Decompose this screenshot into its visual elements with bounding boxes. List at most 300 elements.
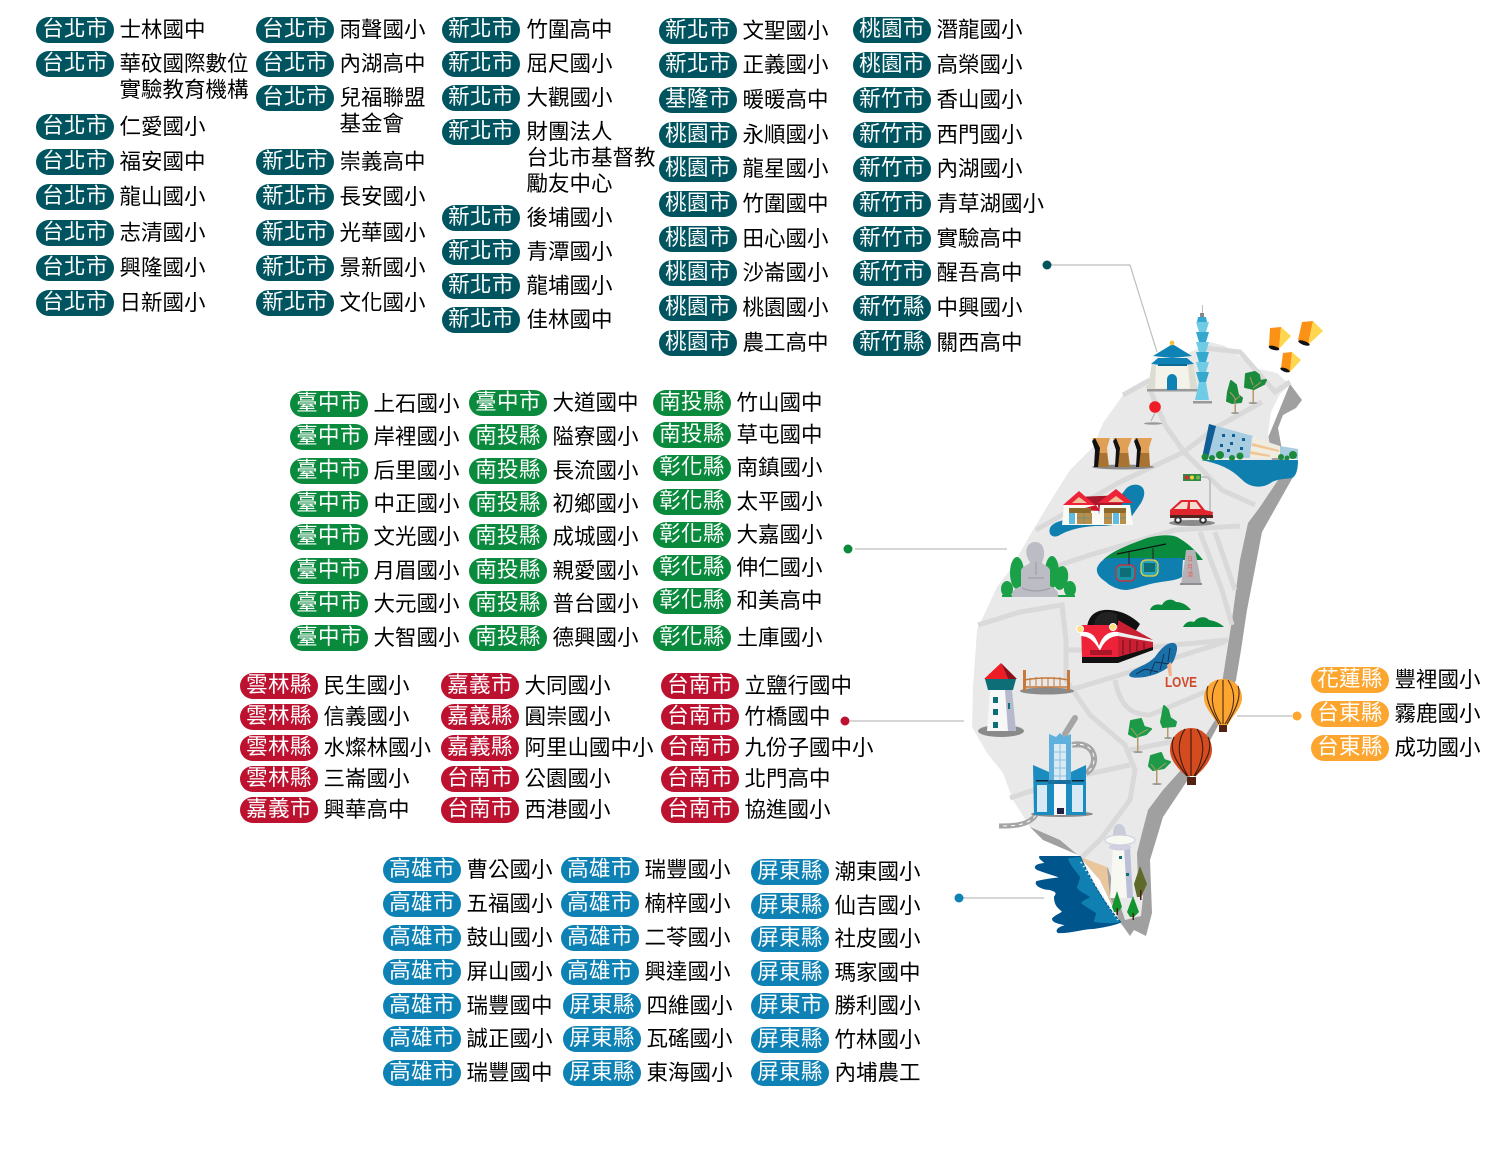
school: 台南市 九份子國中小: 台南市 <box>667 735 733 759</box>
school: 基隆市 暖暖高中: 暖暖高中 <box>742 88 829 112</box>
school: 彰化縣 大嘉國小 <box>653 522 853 548</box>
school: 新北市 光華國小: 新北市 <box>262 220 328 244</box>
icon: Sun Moon Lake with gondola: 潭 <box>1187 571 1193 579</box>
school: 台南市 九份子國中小: 九份子國中小 <box>744 736 874 760</box>
school: 桃園市 永順國小: 桃園市 <box>665 122 731 146</box>
school: 臺中市 大元國小: 大元國小 <box>374 592 460 616</box>
school: 台北市 內湖高中: 台北市 <box>262 51 328 75</box>
school: 臺中市 大智國小 <box>290 625 490 651</box>
school: 新北市 文聖國小 <box>659 18 829 44</box>
school: 新北市 正義國小: 正義國小 <box>742 53 829 77</box>
school: 台北市 華砇國際數位實驗教育機構: 華砇國際數位 <box>120 52 249 76</box>
school: 桃園市 高榮國小: 高榮國小 <box>936 53 1023 77</box>
school: 南投縣 普台國小: 南投縣 <box>475 591 541 615</box>
school: 新竹市 西門國小: 新竹市 <box>859 122 925 146</box>
school: 臺中市 大道國中 <box>469 390 669 416</box>
icon: map pin <box>1144 401 1162 425</box>
school: 新北市 後埔國小: 後埔國小 <box>526 206 613 230</box>
school: 屏東縣 四維國小 <box>563 993 763 1019</box>
school: 南投縣 初鄉國小 <box>469 491 669 517</box>
school: 屏東縣 瓦磘國小 <box>563 1026 763 1052</box>
school: 台北市 日新國小: 台北市 <box>42 290 108 314</box>
school: 嘉義縣 圓崇國小: 嘉義縣 <box>447 704 513 728</box>
school: 台北市 志清國小: 志清國小 <box>120 221 206 245</box>
school: 彰化縣 南鎮國小: 彰化縣 <box>659 455 725 479</box>
school: 台南市 西港國小 <box>441 797 641 823</box>
school: 臺中市 文光國小 <box>290 524 490 550</box>
icon: Alishan train <box>1076 610 1153 663</box>
school: 新北市 竹圍高中: 新北市 <box>448 17 514 41</box>
school: 南投縣 初鄉國小: 初鄉國小 <box>552 492 639 516</box>
school: 新北市 龍埔國小: 龍埔國小 <box>526 274 613 298</box>
connector lines <box>850 265 1292 898</box>
school: 高雄市 鼓山國小: 鼓山國小 <box>466 926 553 950</box>
icon: red car <box>1169 500 1215 526</box>
school: 台北市 龍山國小: 台北市 <box>42 184 108 208</box>
school: 嘉義市 大同國小 <box>441 673 641 699</box>
school: 臺中市 大元國小: 臺中市 <box>296 591 362 615</box>
school: 台南市 九份子國中小 <box>661 735 861 761</box>
school: 新北市 崇義高中: 新北市 <box>262 149 328 173</box>
school: 桃園市 農工高中: 農工高中 <box>742 331 829 355</box>
school: 南投縣 初鄉國小: 南投縣 <box>475 491 541 515</box>
school: 新北市 財團法人台北市基督教勵友中心: 財團法人 <box>526 120 613 144</box>
school: 台南市 公園國小: 台南市 <box>447 766 513 790</box>
school: 新北市 屈尺國小 <box>442 51 613 77</box>
school: 高雄市 二苓國小: 二苓國小 <box>644 926 731 950</box>
school: 臺中市 月眉國小 <box>290 558 490 584</box>
school: 新北市 文化國小 <box>256 290 426 316</box>
school: 新北市 正義國小 <box>659 52 829 78</box>
school: 嘉義市 大同國小: 大同國小 <box>524 674 611 698</box>
school: 屏東縣 潮東國小: 潮東國小 <box>834 860 921 884</box>
school: 台南市 竹橋國中: 台南市 <box>667 704 733 728</box>
school: 台北市 仁愛國小: 台北市 <box>42 114 108 138</box>
school: 台南市 北門高中: 北門高中 <box>744 767 831 791</box>
school: 嘉義縣 阿里山國中小: 阿里山國中小 <box>524 736 654 760</box>
school: 台北市 士林國中: 台北市 <box>42 17 108 41</box>
school: 新北市 屈尺國小: 屈尺國小 <box>526 52 613 76</box>
school: 桃園市 龍星國小 <box>659 156 829 182</box>
school: 彰化縣 土庫國小: 土庫國小 <box>736 626 823 650</box>
school: 基隆市 暖暖高中 <box>659 87 829 113</box>
school: 高雄市 誠正國小: 高雄市 <box>389 1026 455 1050</box>
school: 新竹市 西門國小 <box>853 122 1023 148</box>
school: 台北市 興隆國小: 興隆國小 <box>120 256 206 280</box>
school: 新竹市 醒吾高中: 醒吾高中 <box>936 261 1023 285</box>
school: 屏東縣 社皮國小: 社皮國小 <box>834 927 921 951</box>
school: 台北市 日新國小 <box>36 290 206 316</box>
school: 屏東市 勝利國小 <box>751 993 951 1019</box>
school: 高雄市 瑞豐國小: 瑞豐國小 <box>644 858 731 882</box>
school: 桃園市 桃園國小: 桃園市 <box>665 295 731 319</box>
school: 南投縣 隘寮國小: 隘寮國小 <box>552 425 639 449</box>
school: 彰化縣 南鎮國小 <box>653 455 853 481</box>
school: 屏東縣 四維國小: 屏東縣 <box>569 993 635 1017</box>
school: 新竹市 實驗高中: 實驗高中 <box>936 227 1023 251</box>
school: 新北市 崇義高中 <box>256 149 426 175</box>
school: 桃園市 田心國小 <box>659 226 829 252</box>
school: 新北市 財團法人台北市基督教勵友中心 <box>442 119 656 196</box>
school: 南投縣 普台國小 <box>469 591 669 617</box>
school: 臺中市 后里國小: 臺中市 <box>296 458 362 482</box>
school: 雲林縣 信義國小: 雲林縣 <box>246 704 312 728</box>
roads <box>978 348 1290 857</box>
school: 台南市 北門高中 <box>661 766 861 792</box>
school: 新竹市 香山國小: 香山國小 <box>936 88 1023 112</box>
school: 台南市 西港國小: 台南市 <box>447 797 513 821</box>
school: 南投縣 長流國小: 南投縣 <box>475 458 541 482</box>
school: 屏東縣 東海國小 <box>563 1060 763 1086</box>
list: northern schools: 實驗教育機構 <box>120 78 249 102</box>
icon: central trees <box>1129 706 1176 785</box>
school: 南投縣 德興國小: 德興國小 <box>552 626 639 650</box>
school: 台南市 北門高中: 台南市 <box>667 766 733 790</box>
school: 臺中市 月眉國小: 臺中市 <box>296 558 362 582</box>
school: 台北市 興隆國小 <box>36 255 206 281</box>
school: 新竹縣 中興國小: 中興國小 <box>936 296 1023 320</box>
school: 屏東縣 潮東國小: 屏東縣 <box>757 859 823 883</box>
school: 高雄市 屏山國小: 高雄市 <box>389 959 455 983</box>
school: 彰化縣 土庫國小: 彰化縣 <box>659 625 725 649</box>
school: 屏東縣 竹林國小: 竹林國小 <box>834 1028 921 1052</box>
school: 高雄市 瑞豐國中 second: 瑞豐國中 <box>466 1061 553 1085</box>
school: 桃園市 農工高中: 桃園市 <box>665 330 731 354</box>
school: 新北市 文聖國小: 文聖國小 <box>742 19 829 43</box>
school: 新竹市 醒吾高中: 新竹市 <box>859 260 925 284</box>
school: 屏東縣 瑪家國中 <box>751 960 951 986</box>
school: 新北市 青潭國小 <box>442 239 613 265</box>
school: 桃園市 永順國小 <box>659 122 829 148</box>
school: 臺中市 大元國小 <box>290 591 490 617</box>
school: 高雄市 二苓國小 <box>561 925 761 951</box>
school: 台南市 公園國小: 公園國小 <box>524 767 611 791</box>
school: 南投縣 隘寮國小 <box>469 424 669 450</box>
school: 台北市 龍山國小: 龍山國小 <box>120 185 206 209</box>
school: 雲林縣 信義國小 <box>240 704 440 730</box>
school: 新北市 竹圍高中: 竹圍高中 <box>526 18 613 42</box>
school: 桃園市 桃園國小 <box>659 295 829 321</box>
school: 雲林縣 民生國小: 雲林縣 <box>246 673 312 697</box>
school: 彰化縣 和美高中: 和美高中 <box>736 589 823 613</box>
school: 台北市 華砇國際數位實驗教育機構 <box>36 51 249 102</box>
island shadow coast <box>1030 384 1302 936</box>
school: 新北市 青潭國小: 青潭國小 <box>526 240 613 264</box>
icon: northern trees <box>1227 372 1266 414</box>
school: 屏東市 勝利國小: 勝利國小 <box>834 994 921 1018</box>
school: 高雄市 五福國小 <box>383 891 583 917</box>
school: 台南市 竹橋國中 <box>661 704 861 730</box>
school: 南投縣 德興國小: 南投縣 <box>475 625 541 649</box>
school: 新竹市 內湖國小: 新竹市 <box>859 156 925 180</box>
school: 新北市 後埔國小 <box>442 205 613 231</box>
school: 新北市 佳林國中: 新北市 <box>448 307 514 331</box>
school: 高雄市 興達國小 <box>561 959 761 985</box>
school: 新北市 長安國小: 長安國小 <box>340 185 426 209</box>
school: 台北市 興隆國小: 台北市 <box>42 255 108 279</box>
school: 屏東縣 瑪家國中: 屏東縣 <box>757 960 823 984</box>
icon: north coast building and lake <box>1201 424 1298 487</box>
school: 桃園市 田心國小: 桃園市 <box>665 226 731 250</box>
icon: Sun Moon Lake with gondola: 日 <box>1187 556 1193 563</box>
school: 新北市 景新國小: 景新國小 <box>340 256 426 280</box>
school: 雲林縣 信義國小: 信義國小 <box>324 705 410 729</box>
school: 新北市 大觀國小: 大觀國小 <box>526 86 613 110</box>
school: 屏東縣 東海國小: 東海國小 <box>646 1061 733 1085</box>
school: 台北市 雨聲國小: 台北市 <box>262 17 328 41</box>
school: 桃園市 龍星國小: 龍星國小 <box>742 157 829 181</box>
school: 桃園市 高榮國小: 桃園市 <box>859 52 925 76</box>
school: 屏東縣 竹林國小 <box>751 1027 951 1053</box>
school: 嘉義市 興華高中 <box>240 797 440 823</box>
school: 台東縣 成功國小: 成功國小 <box>1394 736 1481 760</box>
school: 南投縣 長流國小: 長流國小 <box>552 459 639 483</box>
school: 高雄市 五福國小: 五福國小 <box>466 892 553 916</box>
school: 高雄市 曹公國小: 曹公國小 <box>466 858 553 882</box>
school: 嘉義市 興華高中: 嘉義市 <box>246 797 312 821</box>
school: 臺中市 后里國小 <box>290 458 490 484</box>
school: 雲林縣 三崙國小: 三崙國小 <box>324 767 410 791</box>
school: 高雄市 瑞豐國中: 瑞豐國中 <box>466 994 553 1018</box>
school: 台南市 協進國小 <box>661 797 861 823</box>
icon: high-heel shoe and LOVE: LOVE <box>1165 674 1197 691</box>
icon: red hot-air balloon <box>1170 728 1212 785</box>
school: 南投縣 竹山國中: 南投縣 <box>659 390 725 414</box>
school: 南投縣 長流國小 <box>469 458 669 484</box>
school: 臺中市 大道國中: 臺中市 <box>475 390 541 414</box>
school: 台東縣 霧鹿國小: 台東縣 <box>1317 701 1383 725</box>
school: 新北市 長安國小: 新北市 <box>262 184 328 208</box>
school: 彰化縣 伸仁國小: 伸仁國小 <box>736 556 823 580</box>
school: 桃園市 竹圍國中: 桃園市 <box>665 191 731 215</box>
school: 彰化縣 太平國小 <box>653 489 853 515</box>
school: 新北市 景新國小: 新北市 <box>262 255 328 279</box>
school: 台北市 雨聲國小 <box>256 17 426 43</box>
school: 彰化縣 大嘉國小: 大嘉國小 <box>736 523 823 547</box>
school: 屏東市 勝利國小: 屏東市 <box>757 993 823 1017</box>
school: 屏東縣 仙吉國小: 屏東縣 <box>757 893 823 917</box>
school: 屏東縣 竹林國小: 屏東縣 <box>757 1027 823 1051</box>
school: 桃園市 永順國小: 永順國小 <box>742 123 829 147</box>
icon: lake and red-roof houses <box>1049 485 1144 537</box>
school: 南投縣 成城國小 <box>469 524 669 550</box>
school: 臺中市 岸裡國小: 岸裡國小 <box>374 425 460 449</box>
school: 新北市 後埔國小: 新北市 <box>448 205 514 229</box>
school: 南投縣 普台國小: 普台國小 <box>552 592 639 616</box>
school: 南投縣 草屯國中: 南投縣 <box>659 422 725 446</box>
school: 新北市 正義國小: 新北市 <box>665 52 731 76</box>
school: 新北市 崇義高中: 崇義高中 <box>340 150 426 174</box>
school: 桃園市 潛龍國小: 桃園市 <box>859 17 925 41</box>
school: 台北市 華砇國際數位實驗教育機構: 台北市 <box>42 51 108 75</box>
school: 高雄市 瑞豐國中: 高雄市 <box>389 993 455 1017</box>
school: 屏東縣 社皮國小: 屏東縣 <box>757 926 823 950</box>
school: 高雄市 鼓山國小 <box>383 925 583 951</box>
school: 雲林縣 三崙國小: 雲林縣 <box>246 766 312 790</box>
school: 屏東縣 瓦磘國小: 瓦磘國小 <box>646 1027 733 1051</box>
school: 臺中市 后里國小: 后里國小 <box>374 459 460 483</box>
school: 臺中市 上石國小 <box>290 391 490 417</box>
school: 新北市 景新國小 <box>256 255 426 281</box>
icon: Sun Moon Lake with gondola: 月 <box>1187 564 1193 571</box>
school: 台南市 公園國小 <box>441 766 641 792</box>
school: 台北市 志清國小 <box>36 220 206 246</box>
icon: Sun Moon Lake with gondola <box>1097 535 1203 590</box>
school: 嘉義縣 阿里山國中小 <box>441 735 641 761</box>
school: 台東縣 成功國小: 台東縣 <box>1317 735 1383 759</box>
school: 花蓮縣 豐裡國小 <box>1311 667 1500 693</box>
icon: high-heel shoe and LOVE <box>1129 643 1197 691</box>
school: 臺中市 文光國小: 臺中市 <box>296 524 362 548</box>
icon: Taipei 101 <box>1193 305 1212 404</box>
school: 臺中市 中正國小: 中正國小 <box>374 492 460 516</box>
icon: green hills <box>1150 600 1224 627</box>
school: 桃園市 沙崙國小: 沙崙國小 <box>742 261 829 285</box>
school: 嘉義縣 圓崇國小 <box>441 704 641 730</box>
school: 彰化縣 伸仁國小: 彰化縣 <box>659 555 725 579</box>
school: 臺中市 中正國小: 臺中市 <box>296 491 362 515</box>
school: 南投縣 草屯國中 <box>653 422 853 448</box>
list: northern schools: 台北市基督教 <box>526 146 656 170</box>
school: 新竹市 香山國小 <box>853 87 1023 113</box>
school: 新北市 文化國小: 新北市 <box>262 290 328 314</box>
school: 彰化縣 南鎮國小: 南鎮國小 <box>736 456 823 480</box>
school: 台南市 立鹽行國中: 台南市 <box>667 673 733 697</box>
school: 雲林縣 水燦林國小: 水燦林國小 <box>324 736 431 760</box>
school: 台北市 仁愛國小: 仁愛國小 <box>120 115 206 139</box>
school: 台南市 協進國小: 台南市 <box>667 797 733 821</box>
school: 新竹市 內湖國小: 內湖國小 <box>936 157 1023 181</box>
school: 高雄市 楠梓國小: 高雄市 <box>567 891 633 915</box>
school: 台南市 立鹽行國中: 立鹽行國中 <box>744 674 852 698</box>
school: 高雄市 鼓山國小: 高雄市 <box>389 925 455 949</box>
school: 屏東縣 四維國小: 四維國小 <box>646 994 733 1018</box>
school: 高雄市 曹公國小 <box>383 857 583 883</box>
school: 台南市 西港國小: 西港國小 <box>524 798 611 822</box>
school: 台北市 雨聲國小: 雨聲國小 <box>340 18 426 42</box>
icon: Eluanbi lighthouse and trees <box>1105 824 1147 920</box>
school: 新竹市 香山國小: 新竹市 <box>859 87 925 111</box>
school: 彰化縣 太平國小: 太平國小 <box>736 490 823 514</box>
school: 新北市 龍埔國小 <box>442 273 613 299</box>
school: 雲林縣 民生國小: 民生國小 <box>324 674 410 698</box>
school: 台北市 福安國中: 福安國中 <box>120 150 206 174</box>
school: 屏東縣 內埔農工: 內埔農工 <box>834 1061 921 1085</box>
school: 新北市 佳林國中 <box>442 307 613 333</box>
school: 高雄市 楠梓國小: 楠梓國小 <box>644 892 731 916</box>
school: 桃園市 沙崙國小: 桃園市 <box>665 260 731 284</box>
school: 嘉義市 興華高中: 興華高中 <box>324 798 410 822</box>
school: 台南市 協進國小: 協進國小 <box>744 798 831 822</box>
school: 臺中市 上石國小: 臺中市 <box>296 391 362 415</box>
school: 新竹縣 關西高中 <box>853 330 1053 356</box>
school: 臺中市 中正國小 <box>290 491 490 517</box>
school: 臺中市 大智國小: 大智國小 <box>374 626 460 650</box>
school: 新竹市 內湖國小 <box>853 156 1023 182</box>
school: 新竹市 醒吾高中 <box>853 260 1053 286</box>
school: 南投縣 成城國小: 南投縣 <box>475 524 541 548</box>
school: 高雄市 瑞豐國中 <box>383 993 583 1019</box>
school: 新北市 大觀國小 <box>442 85 613 111</box>
school: 屏東縣 內埔農工 <box>751 1060 951 1086</box>
connector dots <box>840 260 1302 902</box>
school: 臺中市 岸裡國小 <box>290 424 490 450</box>
school: 台北市 福安國中 <box>36 149 206 175</box>
list: Yunlin Chiayi Tainan schools <box>240 673 880 823</box>
school: 新北市 屈尺國小: 新北市 <box>448 51 514 75</box>
school: 新北市 文聖國小: 新北市 <box>665 18 731 42</box>
school: 新竹縣 關西高中: 新竹縣 <box>859 330 925 354</box>
school: 南投縣 成城國小: 成城國小 <box>552 525 639 549</box>
school: 桃園市 高榮國小 <box>853 52 1023 78</box>
school: 南投縣 竹山國中 <box>653 390 853 416</box>
school: 新竹縣 中興國小: 新竹縣 <box>859 295 925 319</box>
school: 雲林縣 三崙國小 <box>240 766 440 792</box>
school: 屏東縣 瑪家國中: 瑪家國中 <box>834 961 921 985</box>
school: 高雄市 楠梓國小 <box>561 891 761 917</box>
school: 雲林縣 民生國小 <box>240 673 440 699</box>
school: 花蓮縣 豐裡國小: 豐裡國小 <box>1394 668 1481 692</box>
school: 屏東縣 內埔農工: 屏東縣 <box>757 1060 823 1084</box>
school: 南投縣 竹山國中: 竹山國中 <box>736 391 823 415</box>
school: 屏東縣 潮東國小 <box>751 859 951 885</box>
school: 高雄市 屏山國小: 屏山國小 <box>466 960 553 984</box>
list: central schools <box>290 390 830 652</box>
school: 高雄市 瑞豐國小: 高雄市 <box>567 857 633 881</box>
school: 屏東縣 東海國小: 屏東縣 <box>569 1060 635 1084</box>
school: 新竹市 實驗高中 <box>853 226 1053 252</box>
school: 高雄市 興達國小: 興達國小 <box>644 960 731 984</box>
school: 新北市 竹圍高中 <box>442 17 613 43</box>
icon: Great Buddha <box>1001 542 1076 597</box>
school: 台北市 內湖高中 <box>256 51 426 77</box>
school: 新北市 財團法人台北市基督教勵友中心: 新北市 <box>448 119 514 143</box>
school: 新北市 龍埔國小: 新北市 <box>448 273 514 297</box>
school: 新竹縣 中興國小 <box>853 295 1053 321</box>
school: 高雄市 興達國小: 高雄市 <box>567 959 633 983</box>
icon: eroded rock pillars <box>1092 438 1154 470</box>
icon: red-roof lighthouse <box>978 663 1024 737</box>
list: northern schools <box>36 17 1044 356</box>
school: 新北市 大觀國小: 新北市 <box>448 85 514 109</box>
school: 桃園市 桃園國小: 桃園國小 <box>742 296 829 320</box>
school: 桃園市 沙崙國小 <box>659 260 829 286</box>
school: 台北市 龍山國小 <box>36 184 206 210</box>
school: 新北市 光華國小 <box>256 220 426 246</box>
school: 台北市 兒福聯盟基金會: 台北市 <box>262 85 328 109</box>
school: 南投縣 草屯國中: 草屯國中 <box>736 423 823 447</box>
school: 新竹市 實驗高中: 新竹市 <box>859 226 925 250</box>
school: 屏東縣 仙吉國小 <box>751 893 951 919</box>
list: northern schools: 勵友中心 <box>526 172 613 196</box>
school: 新竹市 青草湖國小: 青草湖國小 <box>936 192 1044 216</box>
school: 嘉義縣 圓崇國小: 圓崇國小 <box>524 705 611 729</box>
school: 雲林縣 水燦林國小: 雲林縣 <box>246 735 312 759</box>
school: 台東縣 霧鹿國小: 霧鹿國小 <box>1394 702 1481 726</box>
school: 高雄市 誠正國小 <box>383 1026 583 1052</box>
school: 屏東縣 社皮國小 <box>751 926 951 952</box>
school: 高雄市 瑞豐國中 second: 高雄市 <box>389 1060 455 1084</box>
school: 新北市 長安國小 <box>256 184 426 210</box>
icon: orange hot-air balloon <box>1204 679 1242 732</box>
icon: sky lanterns <box>1268 321 1323 373</box>
icon: southern sea <box>1036 857 1120 932</box>
school: 彰化縣 伸仁國小 <box>653 555 853 581</box>
school: 基隆市 暖暖高中: 基隆市 <box>665 87 731 111</box>
school: 花蓮縣 豐裡國小: 花蓮縣 <box>1317 667 1383 691</box>
school: 臺中市 大道國中: 大道國中 <box>552 391 639 415</box>
school: 新北市 青潭國小: 新北市 <box>448 239 514 263</box>
